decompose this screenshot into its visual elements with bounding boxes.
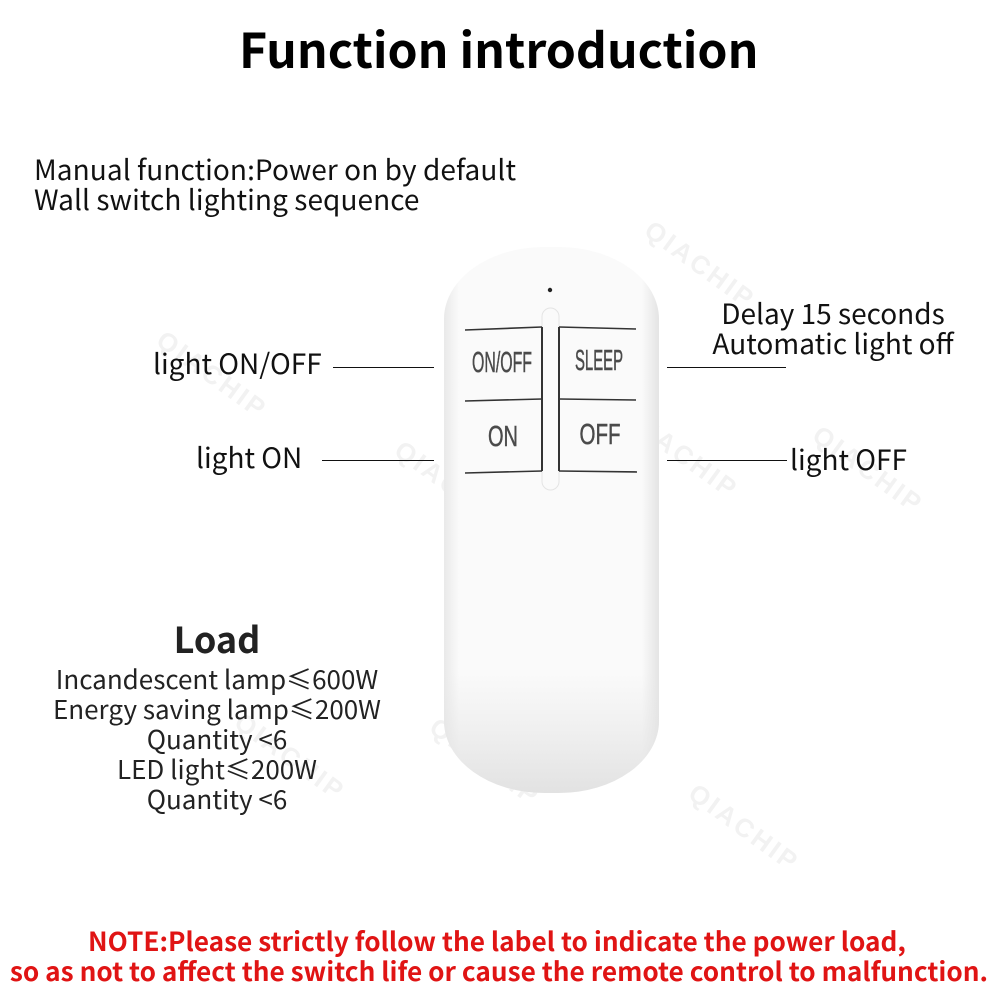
load list: Energy saving lamp≤200W [53,690,381,727]
text: QIACHIP [389,434,511,535]
red note: so as not to affect the switch life or cause the remote control to malfunction. [10,952,988,989]
label: light OFF: light OFF [790,439,907,479]
load heading: Load [174,612,260,664]
text: QIACHIP [229,706,351,807]
load list: Incandescent lamp≤600W [56,660,378,697]
load list [53,660,381,817]
manual function text: Wall switch lighting sequence [34,179,420,219]
label: delay: Delay 15 seconds [721,293,945,333]
remote control: OFF [580,419,620,451]
remote control: SLEEP [575,345,623,377]
load list: LED light≤200W [117,750,317,787]
remote control: ON [488,421,518,453]
load list: Quantity <6 [147,720,287,757]
text: QIACHIP [424,711,546,812]
load list: Quantity <6 [147,780,287,817]
label: delay: Automatic light off [712,323,954,363]
manual function text [34,149,516,219]
remote control: ON/OFF [472,347,532,379]
label: delay [712,293,954,363]
manual function text: Manual function:Power on by default [34,149,516,189]
red note: NOTE:Please strictly follow the label to indicate the power load, [88,922,906,959]
label: light ON/OFF: light ON/OFF [153,343,322,383]
text: QIACHIP [151,324,273,425]
text: QIACHIP [622,404,744,505]
label: light ON: light ON [196,437,302,477]
title: Function introduction [239,12,758,82]
text: QIACHIP [807,419,929,520]
text: QIACHIP [639,214,761,315]
red note [10,922,988,989]
text: QIACHIP [683,777,805,878]
remote control [444,282,659,793]
